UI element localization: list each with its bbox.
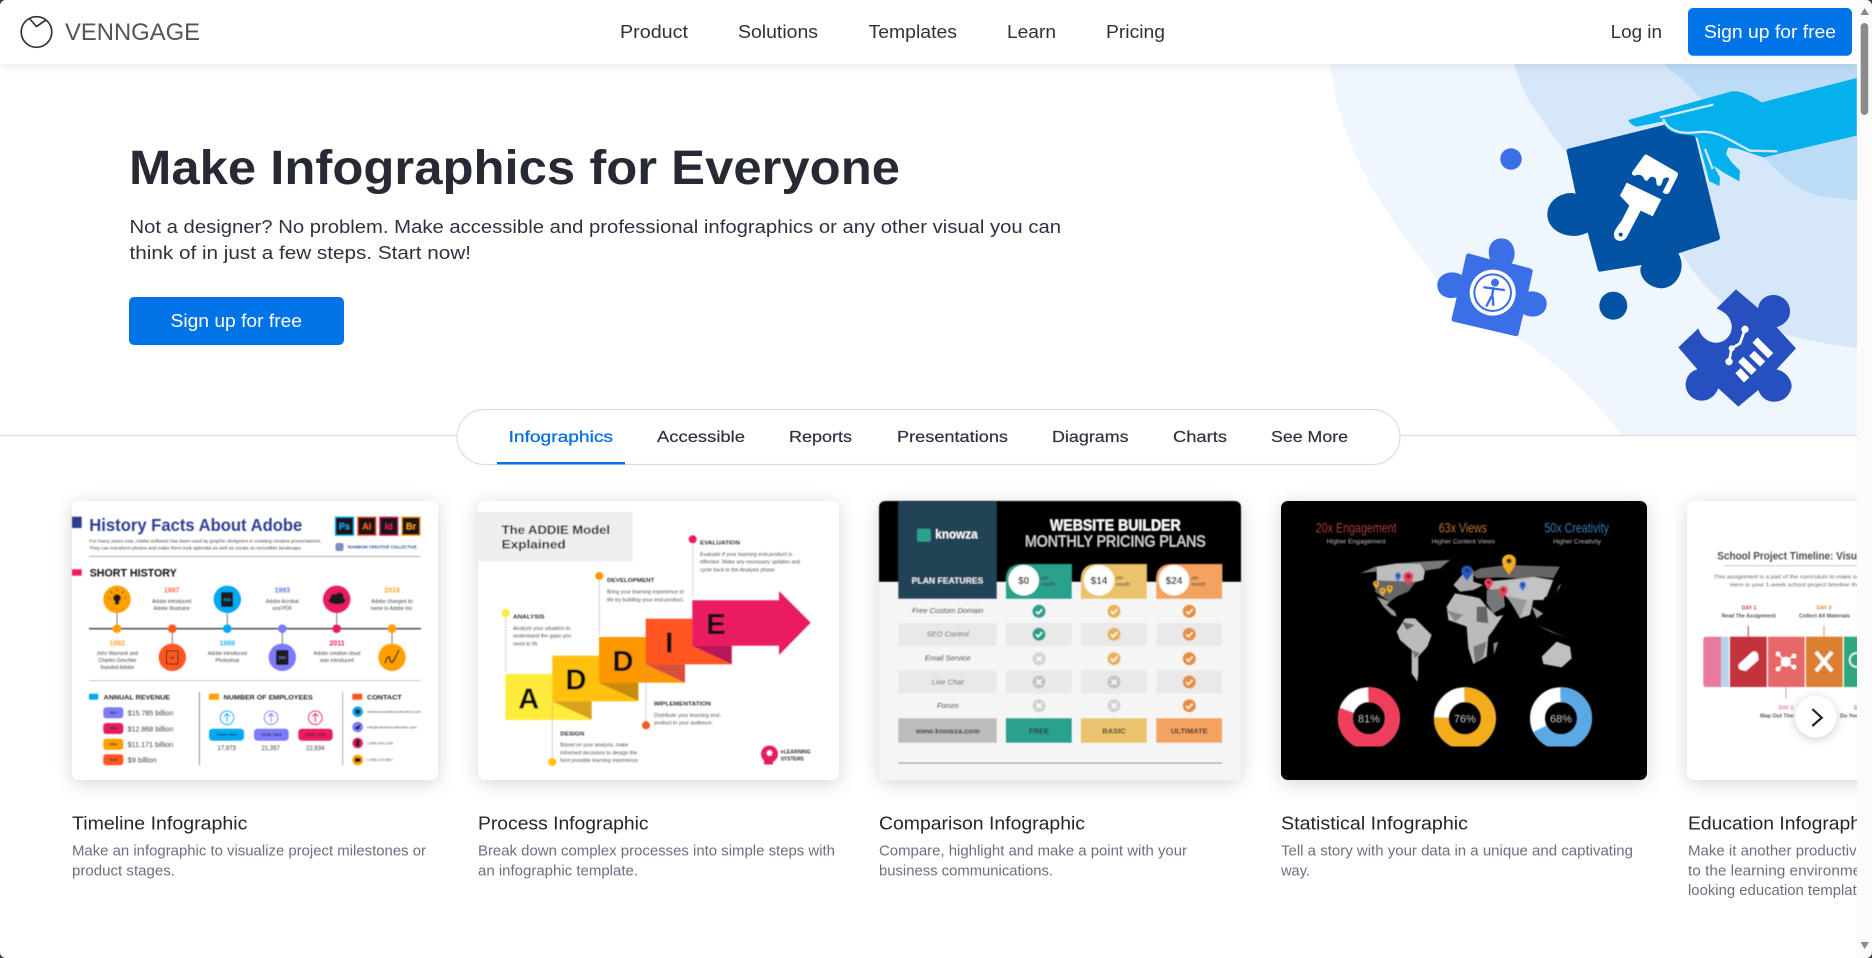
nav links: Product [620,22,688,42]
card: process infographic: life by building your end-product. [607,597,684,603]
card: timeline infographic: Adobe introduced [152,599,192,605]
caption: comparison: business communications. [879,864,1053,880]
card: education infographic: Here is your 1-week school project timeline that [1730,583,1862,589]
annual revenue: 2019 [109,742,117,746]
addie stair chart: I [665,627,673,659]
caption: timeline: Timeline Infographic [72,814,247,834]
timeline [89,586,421,671]
card: timeline infographic: Br [406,522,416,532]
card captions [72,814,1872,899]
caption: statistical: way. [1280,864,1310,880]
category tabs: Charts [1173,429,1227,446]
feature rows: SEO Control [927,629,969,638]
category tabs: Reports [789,429,852,446]
card: education infographic: Read The Assignment [1722,613,1776,619]
annual revenue: $11.171 billion [128,742,173,749]
category tabs: See More [1271,429,1348,446]
caption: comparison: Compare, highlight and make a point with your [879,844,1187,860]
card: education infographic: Do You [1840,713,1859,719]
card: comparison infographic: knowza [935,526,978,541]
card: process infographic: understand the gaps you [513,634,571,640]
hero heading: Make Infographics for Everyone [129,142,900,195]
card: education infographic: Map Out The Flow [1760,713,1808,719]
card: timeline infographic: founded Adobe [100,665,134,671]
pricing column heads: per [1115,575,1124,581]
sign up button: Sign up for free [1704,22,1836,42]
pricing column heads [1006,564,1222,599]
hero paragraph [130,217,1061,263]
sign up button [1688,8,1852,56]
plan name row: www.knowza.com [915,726,980,735]
card: timeline infographic: 1982 [110,640,125,647]
card: education infographic: DAY 2 [1779,705,1793,711]
card: process infographic: Based on your analysis, make [560,743,629,749]
category tabs: Presentations [897,429,1008,446]
card: statistical infographic: 50x Creativity [1544,519,1609,535]
card: comparison infographic: MONTHLY PRICING PLANS [1025,534,1206,551]
number of employees [209,694,333,752]
card: education infographic: DAY 3 [1817,605,1831,611]
timeline: Ai [171,656,174,660]
feature rows: Forum [937,701,959,710]
elearning systems logo [761,746,811,764]
card: process infographic: DEVELOPMENT [607,578,655,584]
contact [352,694,421,765]
nav links [620,22,1165,42]
nav links: Learn [1007,22,1056,42]
card: process infographic: informed decisions to design the [560,750,638,756]
card: timeline infographic: Id [385,522,393,532]
card: process infographic: effective. Make any necessary updates and [700,560,800,566]
hero paragraph: Not a designer? No problem. Make accessible and professional infographics or any other visual you can [130,217,1061,237]
card: statistical infographic: 76% [1454,713,1476,725]
caption: comparison: Comparison Infographic [879,814,1085,834]
card: education infographic: This assignment is a part of the curriculum to make sure [1714,574,1865,580]
caption: statistical: Statistical Infographic [1281,814,1468,834]
map pins [1373,554,1526,598]
addie stair chart: A [518,683,539,715]
card: timeline infographic: 2018 [384,588,400,595]
number of employees: YEAR: 2018 [261,733,282,737]
plan name row: BASIC [1102,726,1126,735]
card: process infographic: Bring your learning experience to [607,590,684,596]
feature rows: Free Custom Domain [912,606,983,615]
hero paragraph: think of in just a few steps. Start now! [130,243,471,263]
icon: blue hand [1628,78,1857,186]
addie stair chart: E [706,609,726,641]
addie stair chart: D [566,664,586,696]
number of employees: 17,973 [218,746,237,752]
elearning systems logo: eLEARNING [781,750,811,756]
caption: process [478,814,835,880]
timeline: PSD [224,598,231,602]
card: education infographic: Collect All Materials [1799,613,1850,619]
icon: dark blue dot [1599,292,1627,320]
feature rows: Live Chat [932,677,964,686]
card: timeline infographic: SHORT HISTORY [90,568,177,580]
annual revenue: ANNUAL REVENUE [104,694,170,701]
feature rows: Email Service [925,654,971,663]
category tabs [0,410,1857,464]
plan name row: FREE [1029,726,1049,735]
caption: timeline: product stages. [72,864,175,880]
pricing column heads: month [1192,582,1206,588]
card: process infographic: product to your audience. [654,721,713,727]
number of employees: 22,634 [306,746,325,752]
pricing column heads: $0 [1018,576,1030,587]
card: timeline infographic: Adobe Acrobat [266,599,299,605]
card: statistical infographic: Higher Content Views [1432,538,1496,545]
brand name: VENNGAGE [65,19,200,46]
addie stair chart [505,591,811,720]
card: process infographic: Explained [502,538,566,552]
annual revenue: $9 billion [128,758,157,765]
annual revenue: 2020 [109,727,117,731]
plan name row [898,718,1222,743]
caption: education [1688,816,1857,898]
donut charts [1345,695,1584,742]
log in link: Log in [1611,22,1662,42]
number of employees: YEAR: 2019 [305,733,326,737]
card: process infographic: cycle back to the Analysis phase. [700,567,776,573]
card: statistical infographic: Higher Engagement [1327,538,1386,545]
card: timeline infographic: John Warnock and [97,651,138,657]
card: statistical infographic: 68% [1550,713,1572,725]
carousel next arrow [1795,696,1836,737]
caption: education: looking education template [1688,883,1865,899]
timeline: PDF [279,656,286,660]
contact: info@rainbowcollective.com [367,725,417,729]
card: timeline infographic: Ps [339,522,350,532]
contact: rainbowcreativecollective.com [367,710,421,714]
caption: education: Make it another productive [1688,844,1865,860]
card: statistical infographic: 81% [1358,713,1380,725]
card: statistical infographic: 63x Views [1439,519,1487,535]
icon: dark blue puzzle piece with paint brush [1547,125,1720,288]
card: comparison infographic: PLAN FEATURES [912,576,984,586]
hero sign up button: Sign up for free [170,311,302,331]
card: process infographic: Evaluate if your learning end-product is [700,552,793,558]
top navigation bar [0,0,1857,64]
pricing column heads: $14 [1091,576,1108,587]
card: timeline infographic: and PDF [272,606,292,612]
caption: education: Education Infographic [1688,814,1872,834]
number of employees: YEAR: 2017 [216,733,237,737]
hero illustration [1330,64,1857,435]
card: timeline infographic: Charles Geschke [98,658,137,664]
card: timeline infographic: They can transform photos and make them look splendid as well as create an incredible landscape. [89,545,302,550]
caption: education: to the learning environment [1688,864,1872,880]
caption: process: Break down complex processes into simple steps with [478,844,835,860]
annual revenue [89,694,173,765]
category tabs: Accessible [657,429,745,446]
icon: small blue dot [1500,148,1522,170]
plan name row: ULTIMATE [1171,726,1208,735]
card: timeline infographic: Adobe creative cloud [314,651,361,657]
card: process infographic: The ADDIE Model [502,523,610,537]
scrollbar [1857,0,1872,958]
pricing column heads: per [1040,575,1049,581]
annual revenue: 2018 [109,758,117,762]
card: timeline infographic: 1987 [164,588,180,595]
number of employees: NUMBER OF EMPLOYEES [224,694,313,701]
card: statistical infographic: 20x Engagement [1316,519,1397,535]
block icons [1738,651,1864,671]
caption: timeline: Make an infographic to visualize project milestones or [72,844,426,860]
annual revenue: $12.868 billion [128,726,173,733]
number of employees: 21,357 [262,746,281,752]
card: process infographic: Distribute your learning end- [654,713,721,719]
nav links: Pricing [1106,22,1165,42]
pricing column heads: month [1041,582,1055,588]
icon: venngage logo [21,17,52,47]
card: process infographic: DESIGN [560,731,584,737]
card: timeline infographic [72,501,438,780]
caption: process: an infographic template. [478,864,638,880]
card: education infographic: DAY 4 [1854,705,1869,711]
hero sign up button [129,297,344,345]
contact: CONTACT [367,694,403,701]
card: process infographic: EVALUATION [700,541,740,547]
addie stair chart: D [613,646,633,678]
annual revenue: 2021 [109,711,117,715]
elearning systems logo: SYSTEMS [781,757,804,763]
card: timeline infographic: RAINBOW CREATIVE COLLECTIVE [348,544,417,550]
card: statistical infographic: Higher Creativity [1553,538,1602,545]
card: comparison infographic [879,501,1241,780]
card: process infographic: Analyze your situation to [513,626,571,632]
card: timeline infographic: Ai [362,522,371,532]
caption: timeline [72,814,426,880]
card: education infographic: DAY 1 [1742,605,1756,611]
caption: process: Process Infographic [478,814,649,834]
contact: 1-555-123-4567 [367,758,393,762]
card: timeline infographic: 2011 [329,640,345,647]
caption: statistical [1280,814,1633,880]
card: timeline infographic: Adobe Illustrator [153,606,190,612]
card: timeline infographic: 1989 [220,640,235,647]
category tabs: Infographics [509,429,613,446]
card: process infographic: need to fill. [513,641,538,647]
card: process infographic: ANALYSIS [513,615,545,621]
card: comparison infographic: WEBSITE BUILDER [1050,518,1181,535]
card: process infographic [478,501,839,780]
nav links: Templates [868,22,957,42]
pricing column heads: month [1116,582,1130,588]
card: timeline infographic: Photoshop [215,658,239,664]
card: timeline infographic: For many years now, Adobe software has been used by graphic designers in creating creative presentations. [89,538,322,543]
feature rows [898,605,1222,712]
card: timeline infographic: History Facts About Adobe [89,515,303,535]
world map [1360,554,1572,682]
card: timeline infographic: Adobe introduced [208,651,247,657]
card: process infographic: IMPLEMENTATION [654,702,711,708]
caption: statistical: Tell a story with your data in a unique and captivating [1281,844,1633,860]
card: education infographic [1687,501,1872,780]
card: timeline infographic: was introduced [320,658,354,664]
card: timeline infographic: name to Adobe Inc. [370,606,414,612]
timeline blocks [1703,637,1872,687]
annual revenue: $15.785 billion [128,711,173,718]
pricing column heads: per [1190,575,1199,581]
contact: 1-555-509-1290 [367,741,393,745]
category tabs: Diagrams [1052,429,1129,446]
icon: chart puzzle piece [1678,289,1796,407]
icon: accessibility puzzle piece [1437,238,1547,336]
pricing column heads: $24 [1166,576,1183,587]
caption: comparison [879,814,1187,880]
card: timeline infographic: Adobe changed its [371,599,413,605]
card: timeline infographic: 1993 [275,588,290,595]
card: process infographic: best possible learning experience. [560,758,639,764]
card: statistical infographic [1281,501,1647,780]
nav links: Solutions [738,22,818,42]
